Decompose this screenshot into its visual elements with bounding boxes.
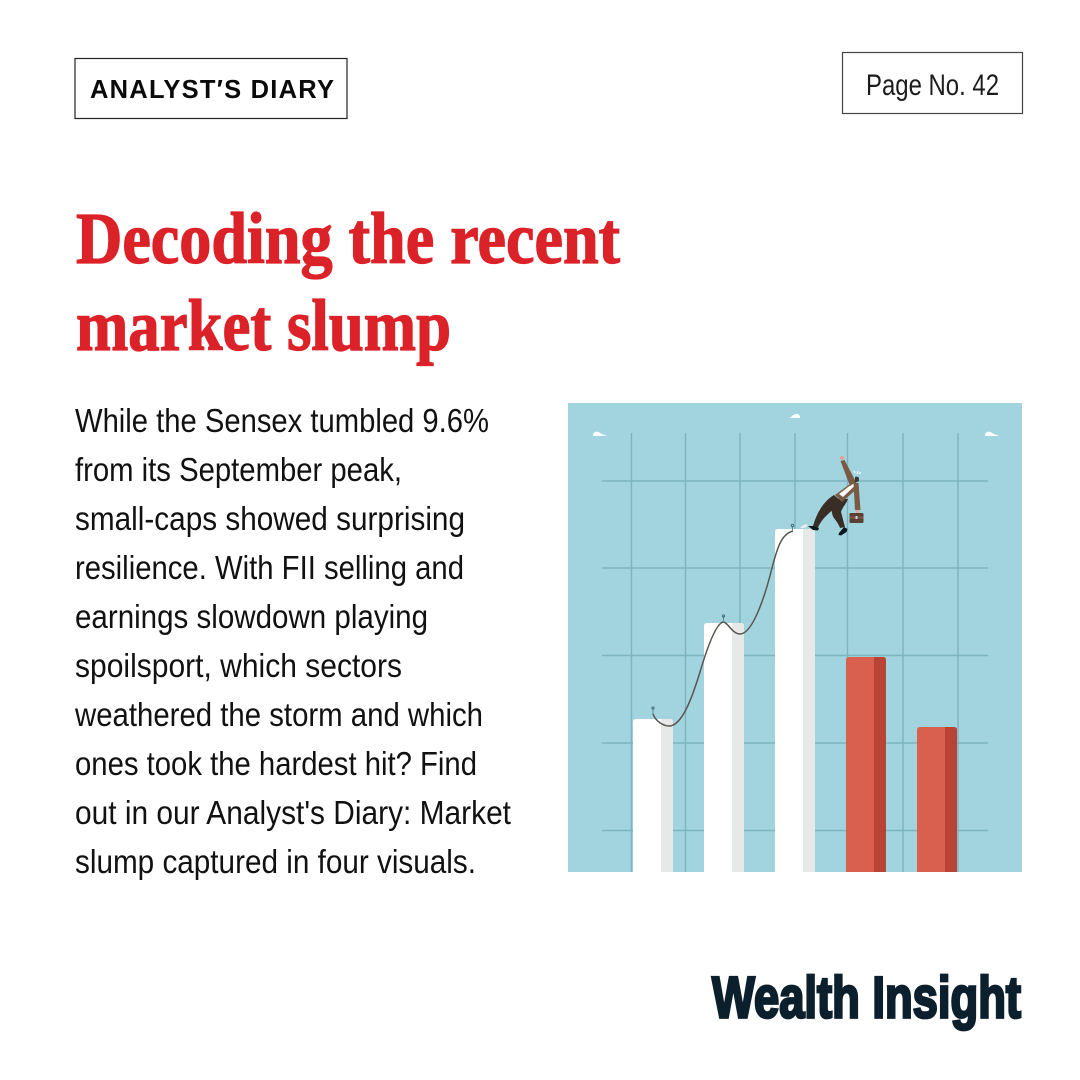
dust puff <box>800 524 808 528</box>
trend curve <box>652 524 794 726</box>
body text: out in our Analyst's Diary: Market <box>75 794 511 831</box>
body text: resilience. With FII selling and <box>75 549 464 586</box>
body text: earnings slowdown playing <box>75 598 428 635</box>
grid lines <box>602 433 988 872</box>
page number box: Page No. 42 <box>866 69 999 102</box>
bars: falling red <box>846 657 957 872</box>
body text: slump captured in four visuals. <box>75 843 476 880</box>
hand and head <box>840 456 844 460</box>
page number box <box>842 52 1022 114</box>
falling businessman <box>800 456 864 536</box>
illustration panel <box>568 403 1022 872</box>
jacket <box>835 481 859 502</box>
body text: small-caps showed surprising <box>75 500 465 537</box>
bars: rising white <box>633 529 815 872</box>
body text <box>74 402 511 880</box>
title: market slump <box>76 285 451 366</box>
briefcase <box>850 513 864 523</box>
body text: from its September peak, <box>75 451 402 488</box>
title <box>76 198 620 366</box>
body text: While the Sensex tumbled 9.6% <box>75 402 489 439</box>
arms <box>840 460 856 486</box>
shoes <box>808 526 819 530</box>
tag: Analyst's Diary: ANALYST′S DIARY <box>90 76 334 104</box>
body text: spoilsport, which sectors <box>75 647 402 684</box>
tag: Analyst's Diary <box>75 58 347 118</box>
body text: weathered the storm and which <box>74 696 483 733</box>
body text: ones took the hardest hit? Find <box>75 745 477 782</box>
title: Decoding the recent <box>76 198 620 279</box>
clouds <box>593 414 999 436</box>
legs <box>813 495 843 528</box>
